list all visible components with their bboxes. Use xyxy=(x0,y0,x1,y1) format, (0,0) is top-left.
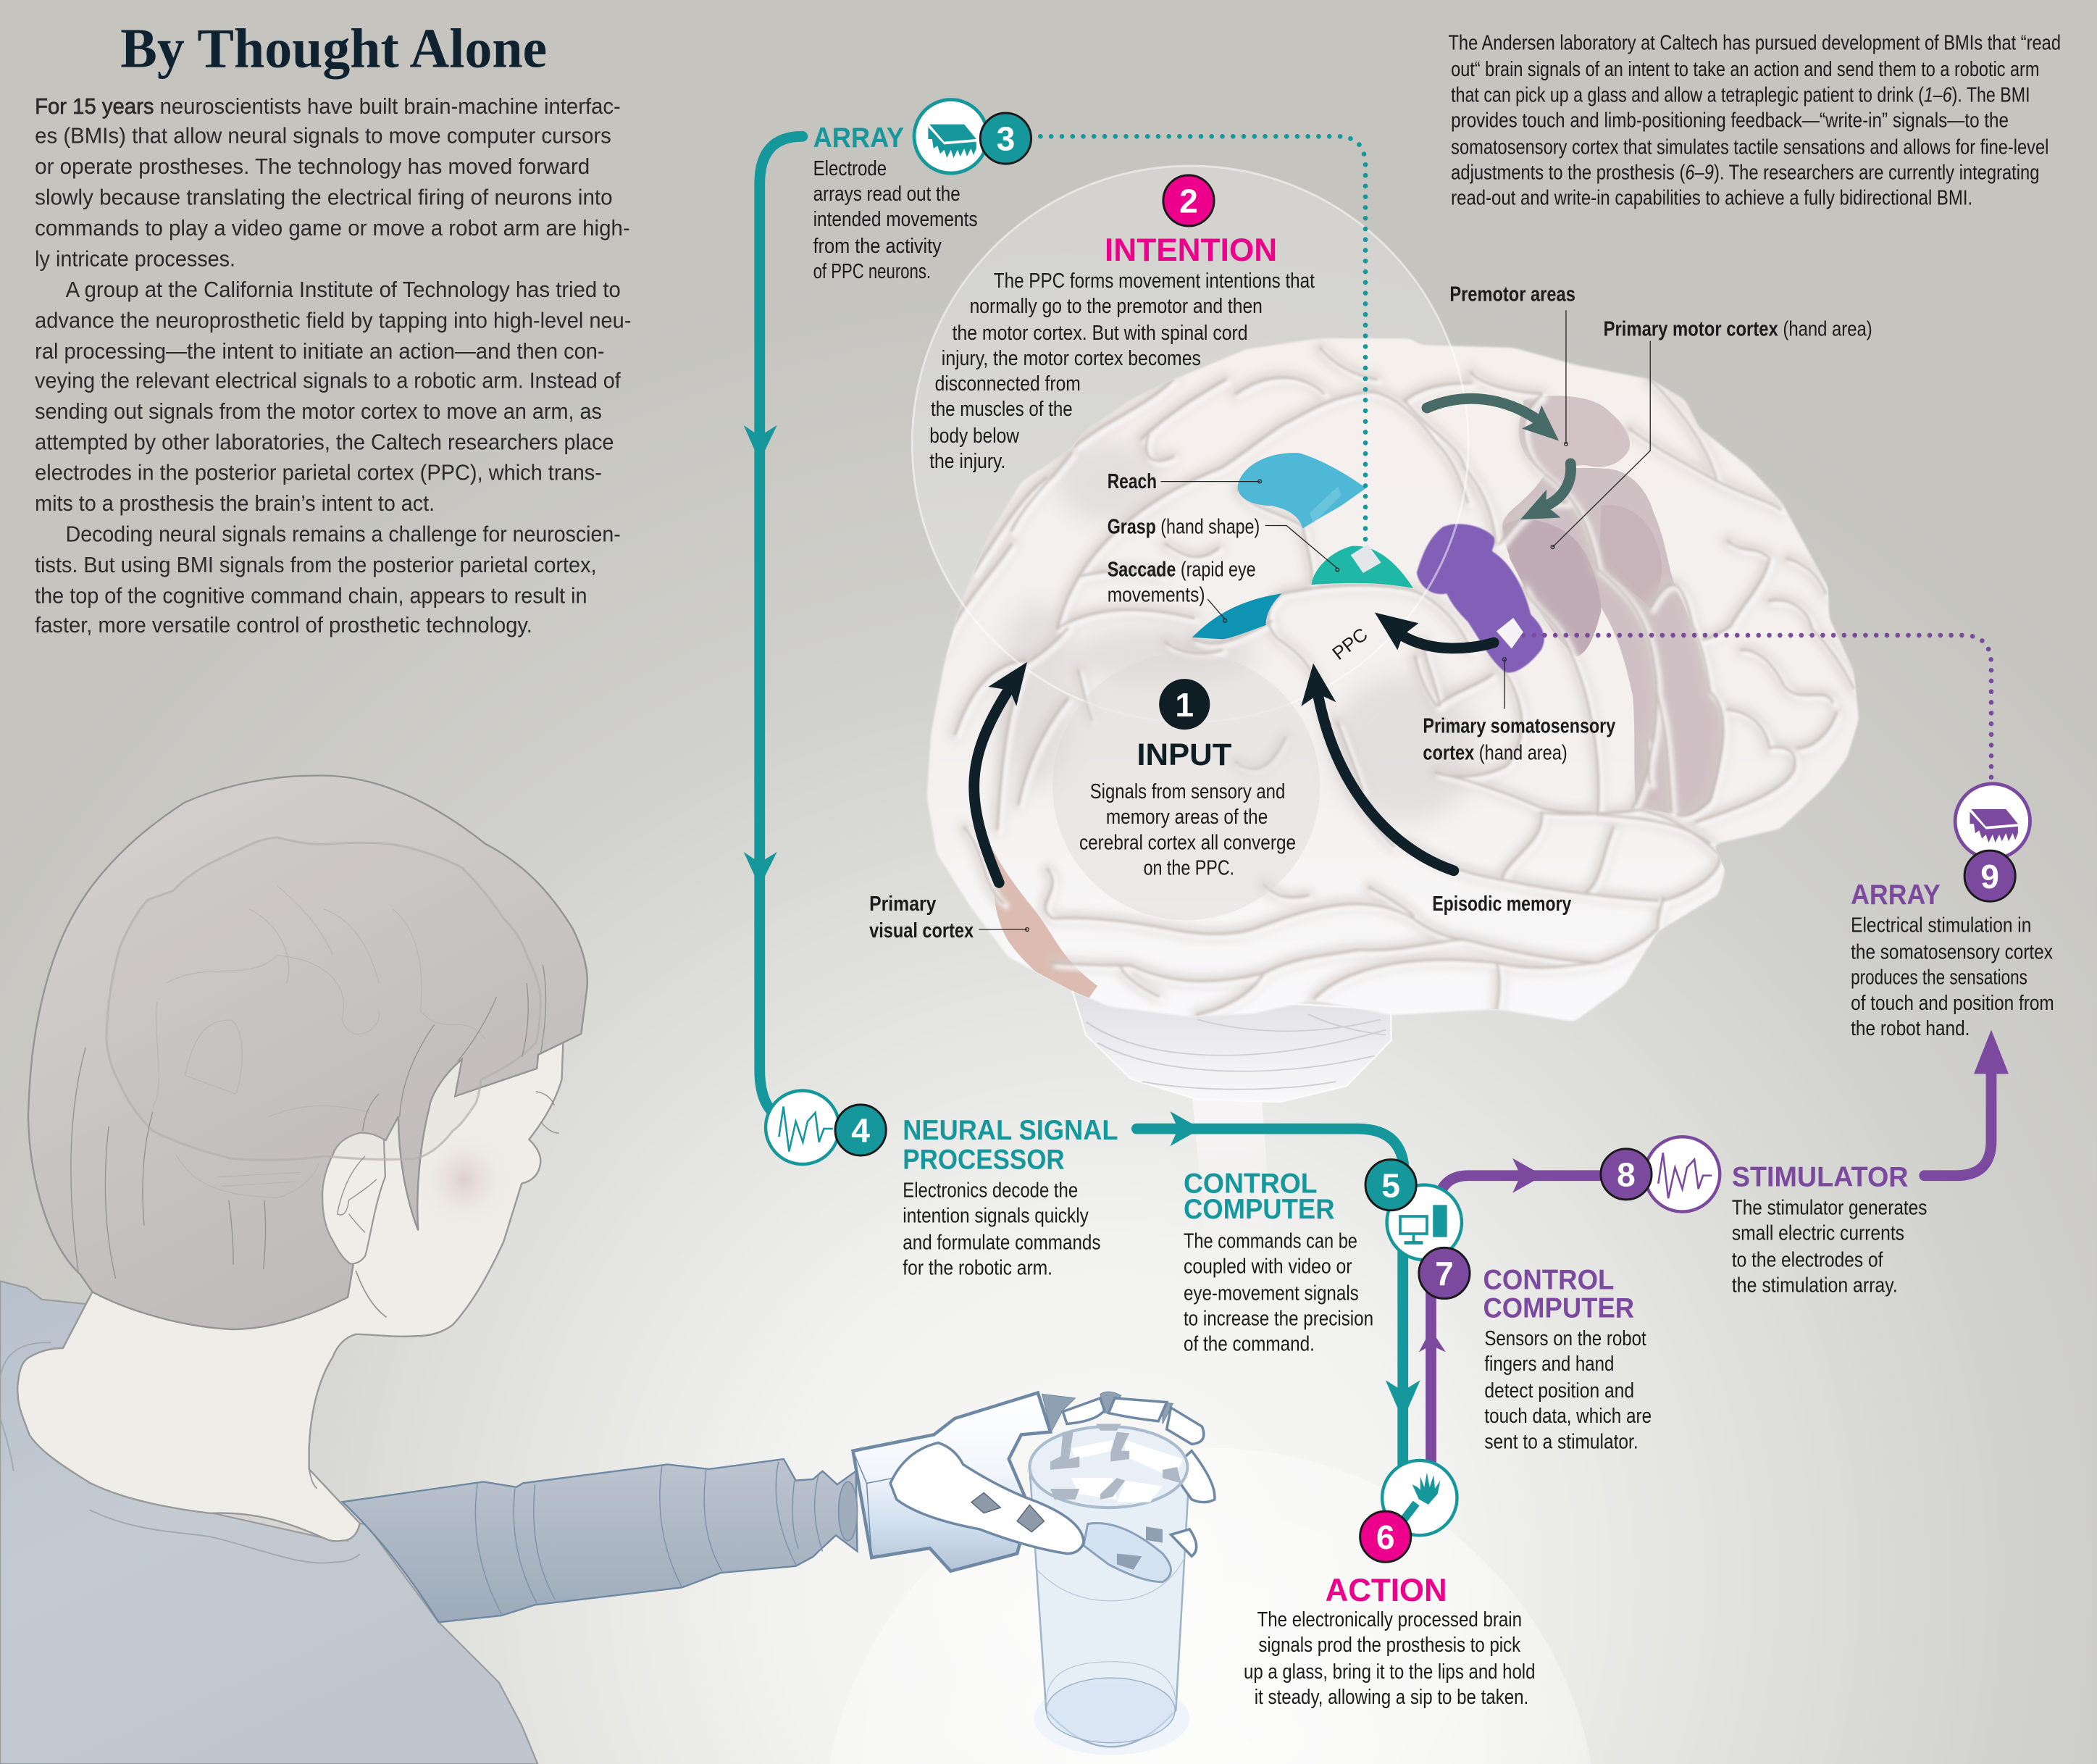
description: signals prod the prosthesis to pick xyxy=(1258,1634,1521,1657)
number badge 9: 9 xyxy=(1980,858,1999,895)
hair strands xyxy=(71,964,559,1279)
icon circle: electrode array 3 xyxy=(914,100,988,173)
nape line xyxy=(309,1468,317,1489)
label: PPC: PPC xyxy=(1329,624,1372,664)
description: Sensors on the robot xyxy=(1484,1327,1646,1350)
purple path: computer to stimulator xyxy=(1440,1158,1612,1193)
teal path: processor to computer xyxy=(1137,1111,1405,1174)
description xyxy=(903,1179,1100,1279)
glass shadow xyxy=(1034,1682,1189,1755)
label: primary motor cortex: Primary motor cortex (hand area) xyxy=(1604,317,1872,340)
number badge 3 xyxy=(980,113,1031,164)
step 4: neural signal processor xyxy=(903,1115,1118,1279)
intro text block: veying the relevant electrical signals to a robotic arm. Instead of xyxy=(35,368,621,393)
intro text block: Decoding neural signals remains a challenge for neuroscien- xyxy=(66,522,621,547)
number badge 7: 7 xyxy=(1435,1255,1454,1292)
intro text block: advance the neuroprosthetic field by tapping into high-level neu- xyxy=(35,308,632,333)
bottom glow circle xyxy=(829,1448,1591,1764)
input circle xyxy=(1052,653,1320,920)
region: primary somatosensory cortex xyxy=(1417,524,1544,673)
brain stem xyxy=(1192,1090,1273,1250)
region: grasp xyxy=(1312,546,1413,588)
number badge 5: 5 xyxy=(1381,1166,1400,1204)
step 1: input xyxy=(1079,737,1296,879)
Andersen laboratory text block: read-out and write-in capabilities to achieve a fully bidirectional BMI. xyxy=(1451,186,1972,209)
intro text block: the top of the cognitive command chain, appears to result in xyxy=(35,584,587,609)
icon circle: stimulation array xyxy=(1955,784,2030,858)
heading xyxy=(903,1115,1118,1175)
label: episodic memory: Episodic memory xyxy=(1432,893,1571,916)
label: saccade: Saccade (rapid eye xyxy=(1108,559,1256,582)
description: coupled with video or xyxy=(1184,1255,1352,1278)
number badge 5 xyxy=(1365,1160,1416,1211)
description: of PPC neurons. xyxy=(813,260,931,283)
teal path: array to processor xyxy=(744,136,803,1113)
illustration: patient xyxy=(0,776,587,1764)
number badge 2 xyxy=(1163,175,1214,226)
number badge 7 xyxy=(1419,1247,1470,1299)
hair xyxy=(28,776,587,1329)
icon circle: robotic hand xyxy=(1382,1460,1457,1535)
arrow: premotor to motor xyxy=(1520,464,1571,519)
heading: PROCESSOR xyxy=(903,1144,1065,1175)
description: The commands can be xyxy=(1184,1229,1357,1253)
number badge 1 xyxy=(1159,679,1210,730)
description xyxy=(1079,780,1296,879)
arrow: PPC to premotor xyxy=(1427,398,1559,440)
description: eye-movement signals xyxy=(1184,1282,1359,1305)
brain illustration xyxy=(927,338,1859,1021)
description: produces the sensations xyxy=(1851,966,2027,990)
intro text block: For 15 years neuroscientists have built brain-machine interfac- xyxy=(35,94,621,119)
electrode array marker: purple xyxy=(1497,618,1523,648)
gyri sulcus lines xyxy=(941,348,1854,1014)
step 7: control computer xyxy=(1483,1265,1652,1453)
purple path: stimulator to array 9 xyxy=(1925,1029,2009,1176)
description: detect position and xyxy=(1484,1379,1634,1403)
description: cerebral cortex all converge xyxy=(1079,831,1296,854)
patient face and neck xyxy=(17,1029,563,1541)
label: visual cortex: visual cortex xyxy=(869,919,974,942)
step 8: stimulator xyxy=(1732,1161,1927,1297)
icon circle: stimulator xyxy=(1645,1137,1720,1212)
number badge 4 xyxy=(835,1105,886,1155)
description: Electrode xyxy=(813,157,887,180)
intention circle outline xyxy=(912,166,1468,722)
description: to increase the precision xyxy=(1184,1307,1373,1330)
description: memory areas of the xyxy=(1106,806,1268,829)
wrist ball joint xyxy=(839,1481,858,1541)
heading: COMPUTER xyxy=(1184,1194,1335,1225)
label: saccade second line: movements) xyxy=(1108,584,1205,607)
reach lighter band xyxy=(1310,486,1342,523)
Andersen laboratory text block: that can pick up a glass and allow a tetraplegic patient to drink (1–6). The BMI xyxy=(1451,83,2030,106)
blush xyxy=(414,1129,515,1230)
heading: ARRAY xyxy=(1851,879,1941,911)
heading: CONTROL xyxy=(1483,1265,1614,1296)
intro text block: es (BMIs) that allow neural signals to move computer cursors xyxy=(35,124,611,149)
dotted link: array 3 to brain xyxy=(1040,136,1365,561)
label: premotor areas: Premotor areas xyxy=(1449,283,1575,306)
number badge 6: 6 xyxy=(1376,1518,1395,1556)
step 9: array xyxy=(1851,879,2054,1040)
heading: CONTROL xyxy=(1184,1169,1318,1200)
label: primary: Primary xyxy=(869,893,936,916)
description xyxy=(1484,1327,1652,1453)
soft gray shading xyxy=(999,441,1478,822)
intro text block: faster, more versatile control of prosthetic technology. xyxy=(35,613,532,638)
glass rim with fingers seen through xyxy=(1029,1426,1187,1508)
thumb xyxy=(890,1443,1084,1554)
description xyxy=(1184,1229,1373,1356)
glass of water and robotic hand xyxy=(853,1392,1215,1755)
description: body below xyxy=(929,425,1019,448)
description: it steady, allowing a sip to be taken. xyxy=(1255,1686,1528,1709)
arrow: primary visual to PPC xyxy=(974,662,1027,882)
description xyxy=(1732,1196,1927,1297)
step 5: control computer xyxy=(1184,1169,1373,1356)
brain overlay on head xyxy=(106,837,540,1197)
intro text block: slowly because translating the electrical firing of neurons into xyxy=(35,185,613,209)
prosthetic arm xyxy=(343,1459,858,1622)
intro text block: ral processing—the intent to initiate an action—and then con- xyxy=(35,339,605,364)
cerebellum xyxy=(1073,991,1391,1102)
intro text block: ly intricate processes. xyxy=(35,246,235,271)
translucent circle: intention background xyxy=(912,166,1468,722)
collar fold line xyxy=(0,1342,360,1563)
arrow: episodic memory to PPC xyxy=(1301,664,1454,871)
number badge 2: 2 xyxy=(1179,183,1198,220)
description: the robot hand. xyxy=(1851,1017,1970,1040)
step 6: action xyxy=(1244,1573,1535,1709)
description: Signals from sensory and xyxy=(1090,780,1285,803)
gyri broad shading xyxy=(941,348,1854,1014)
title: By Thought Alone xyxy=(120,17,547,79)
gyri highlights xyxy=(945,351,1857,1018)
number badge 4: 4 xyxy=(851,1112,870,1150)
description: to the electrodes of xyxy=(1732,1248,1883,1271)
number badge 9 xyxy=(1964,850,2015,901)
brain labels xyxy=(869,283,1872,942)
number badge 6 xyxy=(1360,1511,1411,1562)
intro text block: electrodes in the posterior parietal cortex (PPC), which trans- xyxy=(35,461,602,485)
step 2: intention xyxy=(929,233,1315,473)
region: reach xyxy=(1238,453,1366,529)
Andersen laboratory text block: adjustments to the prosthesis (6–9). The researchers are currently integrating xyxy=(1451,161,2039,184)
description: touch data, which are xyxy=(1484,1405,1652,1428)
electrode array marker: teal xyxy=(1351,544,1381,573)
description: Electronics decode the xyxy=(903,1179,1078,1202)
heading: ARRAY xyxy=(813,122,904,154)
description: the somatosensory cortex xyxy=(1851,941,2053,964)
heading: ACTION xyxy=(1326,1573,1447,1608)
description xyxy=(813,157,978,283)
description: intended movements xyxy=(813,208,978,231)
regions: reach grasp saccade xyxy=(1192,453,1413,639)
description xyxy=(1244,1608,1535,1709)
brain body xyxy=(927,338,1859,1021)
teal path: computer to action xyxy=(1386,1244,1420,1471)
number badge 8: 8 xyxy=(1617,1155,1636,1193)
description: Electrical stimulation in xyxy=(1851,914,2031,937)
step 3: array xyxy=(813,122,978,283)
intro text block: A group at the California Institute of Technology has tried to xyxy=(66,277,621,302)
upper fingers xyxy=(1063,1398,1215,1556)
number badge 8 xyxy=(1601,1149,1652,1200)
intro text block: tists. But using BMI signals from the posterior parietal cortex, xyxy=(35,553,597,577)
heading: INTENTION xyxy=(1105,233,1277,268)
ear xyxy=(322,1133,385,1264)
jaw line xyxy=(356,1271,387,1317)
description: The electronically processed brain xyxy=(1257,1608,1522,1631)
intro text block: or operate prostheses. The technology has moved forward xyxy=(35,154,590,179)
patient shirt xyxy=(0,1282,537,1764)
description: on the PPC. xyxy=(1144,856,1234,879)
description xyxy=(929,269,1315,473)
number badge 1: 1 xyxy=(1175,686,1194,724)
intro text block: mits to a prosthesis the brain’s intent to act. xyxy=(35,491,435,516)
purple path: action to computer xyxy=(1419,1284,1446,1471)
description xyxy=(1851,914,2054,1040)
hand body xyxy=(853,1393,1050,1571)
description: the injury. xyxy=(929,450,1005,473)
heading: NEURAL SIGNAL xyxy=(903,1115,1118,1146)
region: primary visual cortex xyxy=(992,848,1097,1001)
heading: COMPUTER xyxy=(1483,1292,1634,1324)
hand block edges xyxy=(853,1451,892,1558)
label: reach: Reach xyxy=(1108,470,1157,493)
Andersen laboratory text block: provides touch and limb-positioning feedback—“write-in” signals—to the xyxy=(1451,109,2009,132)
heading: STIMULATOR xyxy=(1732,1161,1909,1192)
region: saccade xyxy=(1192,593,1281,639)
description: small electric currents xyxy=(1732,1221,1904,1245)
description: for the robotic arm. xyxy=(903,1256,1052,1279)
heading xyxy=(1184,1169,1335,1225)
arrow: somatosensory to PPC xyxy=(1375,613,1494,650)
description: The PPC forms movement intentions that xyxy=(994,269,1315,293)
icon circle: computer xyxy=(1387,1185,1462,1260)
leader lines xyxy=(979,310,1650,931)
description: disconnected from xyxy=(935,372,1081,396)
number badge 3: 3 xyxy=(997,120,1015,158)
description: of touch and position from xyxy=(1851,992,2054,1015)
dotted link: brain to array 9 xyxy=(1512,635,1991,782)
intro text block: attempted by other laboratories, the Caltech researchers place xyxy=(35,430,614,454)
description: of the command. xyxy=(1184,1333,1315,1356)
label: cortex hand area: cortex (hand area) xyxy=(1423,742,1567,765)
glass body xyxy=(1029,1467,1189,1747)
heading: INPUT xyxy=(1137,737,1231,772)
gray finger joints xyxy=(1042,1392,1173,1432)
label: primary somatosensory cortex: Primary somatosensory xyxy=(1423,715,1615,738)
lower finger behind glass xyxy=(1084,1523,1171,1582)
description: The stimulator generates xyxy=(1732,1196,1927,1219)
intro text block: commands to play a video game or move a robot arm are high- xyxy=(35,216,630,241)
description: intention signals quickly xyxy=(903,1204,1089,1227)
description: from the activity xyxy=(813,235,942,258)
description: and formulate commands xyxy=(903,1231,1100,1254)
icon circle: signal processor xyxy=(766,1090,840,1164)
description: the motor cortex. But with spinal cord xyxy=(953,322,1248,345)
intro text block xyxy=(35,94,632,638)
description: arrays read out the xyxy=(813,183,960,206)
description: sent to a stimulator. xyxy=(1484,1430,1638,1453)
description: normally go to the premotor and then xyxy=(970,295,1263,318)
description: up a glass, bring it to the lips and hold xyxy=(1244,1660,1535,1684)
region: premotor and primary motor cortex xyxy=(1502,396,1723,816)
description: fingers and hand xyxy=(1484,1353,1614,1376)
intro text block: sending out signals from the motor cortex to move an arm, as xyxy=(35,399,602,424)
Andersen laboratory text block xyxy=(1448,31,2061,209)
description: the stimulation array. xyxy=(1732,1274,1898,1297)
label: grasp: Grasp (hand shape) xyxy=(1108,516,1260,539)
description: injury, the motor cortex becomes xyxy=(942,347,1201,370)
description: the muscles of the xyxy=(931,398,1073,421)
heading xyxy=(1483,1265,1634,1324)
